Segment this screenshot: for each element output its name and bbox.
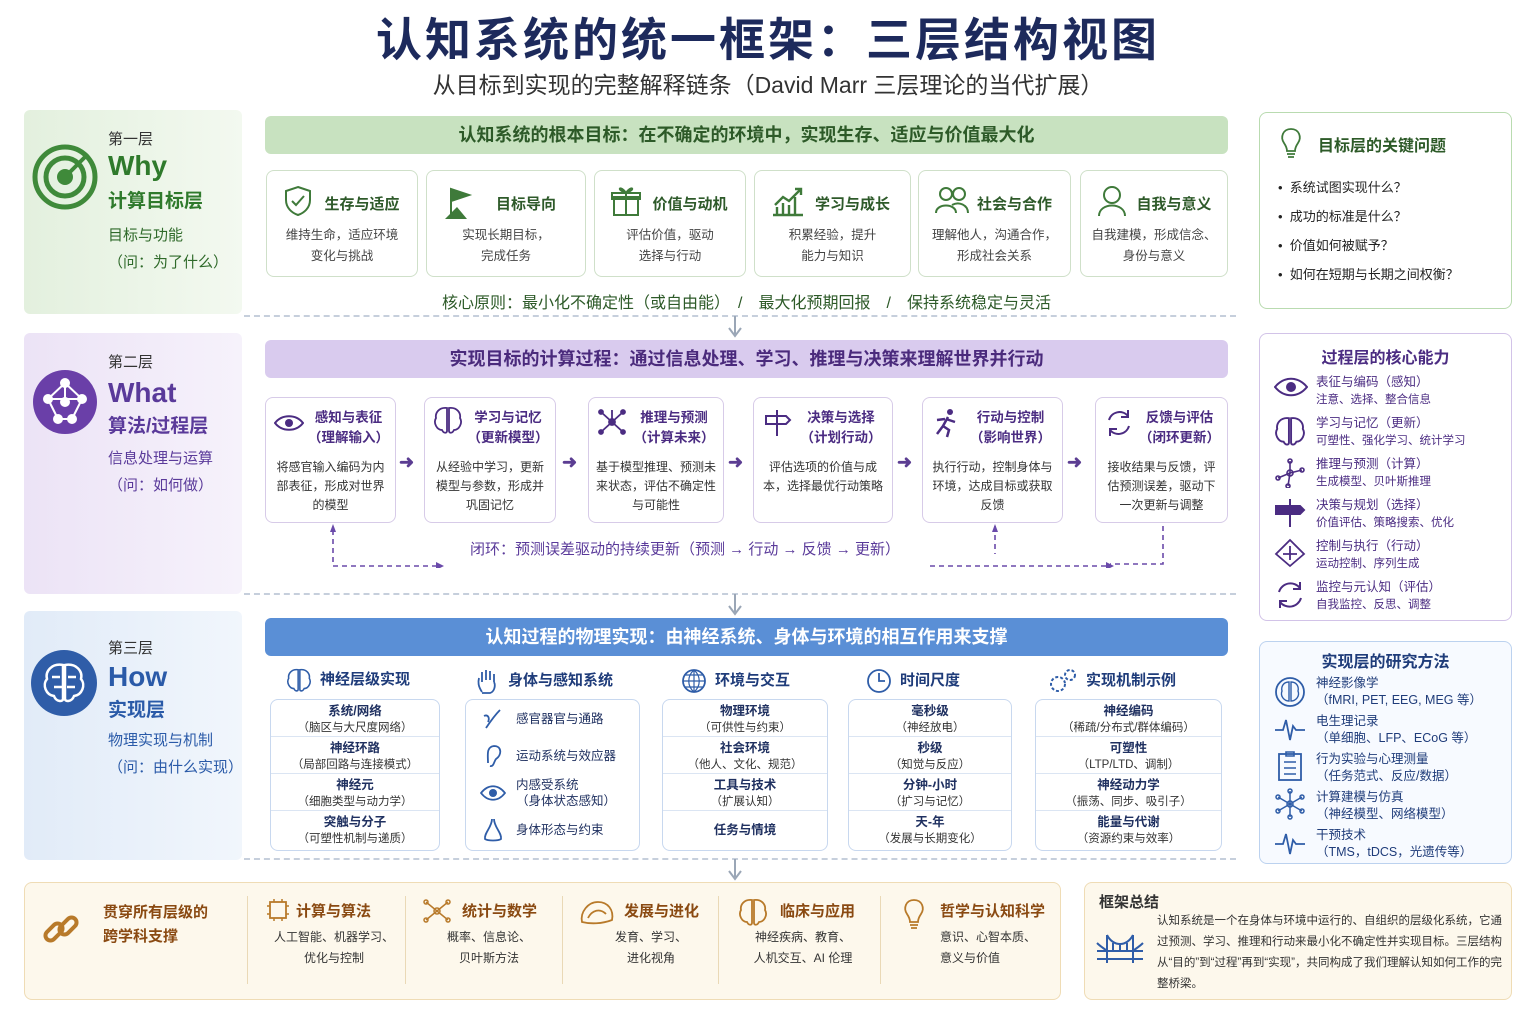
icon: bridge [1096, 934, 1144, 963]
tier 1: Why [24, 110, 242, 314]
icon: network [33, 370, 97, 434]
text: 身份与意义 [1123, 249, 1185, 263]
right panel: process capabilities [1259, 333, 1512, 621]
text: 天-年 [915, 815, 945, 829]
right panel: research methods: 神经影像学 [1316, 676, 1379, 690]
column: neural levels [287, 668, 410, 692]
text: 感官器官与通路 [516, 712, 604, 726]
band 3 header: 认知过程的物理实现：由神经系统、身体与环境的相互作用来支撑 [486, 627, 1008, 647]
text: （知觉与反应） [890, 759, 970, 771]
right panel: process capabilities: 表征与编码（感知） [1316, 375, 1429, 389]
right panel: process capabilities: 监控与元认知（评估） [1316, 580, 1441, 594]
band 2 header: 实现目标的计算过程：通过信息处理、学习、推理与决策来理解世界并行动 [450, 349, 1044, 369]
right panel: research methods: （TMS，tDCS，光遗传等） [1316, 845, 1472, 859]
text: 内感受系统 [516, 778, 579, 792]
arrow: tier2 to tier3 [728, 594, 742, 616]
right panel: process capabilities: 运动控制、序列生成 [1316, 558, 1420, 570]
tier 2: What: （问：如何做） [108, 477, 213, 494]
text: ➜ [399, 452, 414, 472]
process cards [265, 397, 396, 523]
text: （可塑性机制与递质） [298, 833, 412, 845]
text: 学习与成长 [815, 196, 890, 213]
text: 神经环路 [330, 741, 380, 755]
text: （影响世界） [970, 430, 1051, 445]
text: （发展与长期变化） [878, 833, 982, 845]
text: （更新模型） [468, 430, 548, 445]
discipline: clinical: 神经疾病、教育、 [755, 930, 851, 944]
text: （计划行动） [800, 430, 882, 445]
process cards: 感知与表征 [315, 410, 382, 425]
text: 目标导向 [496, 196, 556, 213]
text: （可供性与约束） [699, 722, 791, 734]
text: 能力与知识 [801, 249, 864, 263]
tier 2: What: 信息处理与运算 [108, 450, 213, 467]
column: environment [682, 669, 790, 693]
right panel: research methods: （单细胞、LFP、ECoG 等） [1316, 731, 1476, 745]
discipline: evolution: 发展与进化 [624, 903, 699, 920]
discipline: clinical [739, 899, 855, 965]
goal cards [266, 170, 418, 277]
band 1 header: 认知系统的根本目标：在不确定的环境中，实现生存、适应与价值最大化 [458, 125, 1034, 145]
text: ➜ [897, 452, 912, 472]
text: 身体形态与约束 [516, 822, 604, 836]
text: （细胞类型与动力学） [298, 796, 412, 808]
tier 2: What: What [108, 377, 176, 408]
right panel: process capabilities: 推理与预测（计算） [1316, 457, 1429, 471]
goal cards: 维持生命，适应环境 [286, 228, 398, 242]
text: 系统/网络 [328, 704, 382, 718]
band 3 header [265, 618, 1228, 656]
tier 3: How: 第三层 [108, 640, 153, 657]
tier 2: What: 算法/过程层 [108, 416, 208, 437]
text: 神经编码 [1103, 704, 1154, 718]
text: 从经验中学习，更新模型与参数，形成并巩固记忆 [436, 460, 544, 512]
discipline: statistics: 统计与数学 [462, 903, 537, 920]
discipline: philosophy: 哲学与认知科学 [940, 903, 1045, 920]
text: （神经放电） [896, 722, 964, 734]
right panel: process capabilities: 注意、选择、整合信息 [1316, 394, 1431, 406]
right panel: research methods: 行为实验与心理测量 [1316, 752, 1429, 766]
text: 推理与预测 [640, 410, 708, 425]
subtitle: 从目标到实现的完整解释链条（David Marr 三层理论的当代扩展） [433, 72, 1103, 98]
bottom panel: interdisciplinary support: 贯穿所有层级的 [103, 904, 208, 921]
column: mechanisms: 实现机制示例 [1086, 672, 1176, 689]
icon: bulb [1281, 128, 1301, 158]
bottom right: framework summary: 框架总结 [1099, 894, 1159, 911]
right panel: process capabilities: 过程层的核心能力 [1321, 350, 1450, 367]
goal cards: 变化与挑战 [311, 249, 373, 263]
text: 完成任务 [481, 249, 531, 263]
right panel: goal questions: • 如何在短期与长期之间权衡？ [1278, 267, 1459, 282]
text: （局部回路与连接模式） [292, 759, 418, 771]
right panel: research methods [1259, 641, 1512, 864]
discipline: statistics: 概率、信息论、 [447, 930, 531, 944]
arrow: tier1 to tier2 [728, 316, 742, 338]
text: 形成社会关系 [957, 249, 1032, 263]
loop: closed feedback [330, 524, 1164, 568]
text: 可塑性 [1110, 741, 1147, 755]
bottom right: framework summary [1084, 882, 1512, 1000]
text: （扩习与记忆） [890, 796, 970, 808]
column: neural levels: 神经层级实现 [320, 671, 410, 688]
right panel: research methods: 电生理记录 [1316, 714, 1379, 728]
text: 任务与情境 [714, 823, 776, 837]
right panel: goal questions: 目标层的关键问题 [1318, 138, 1446, 155]
text: 执行行动，控制身体与环境，达成目标或获取反馈 [932, 460, 1052, 512]
icon: target [32, 144, 98, 210]
right panel: goal questions: • 价值如何被赋予？ [1278, 238, 1394, 253]
arrow: tier3 to bottom [728, 859, 742, 880]
discipline: philosophy [904, 899, 1045, 965]
tier 2: What: 第二层 [108, 354, 153, 371]
discipline: evolution: 进化视角 [627, 951, 675, 965]
band 2 header [265, 340, 1228, 378]
right panel: process capabilities: 控制与执行（行动） [1316, 539, 1429, 553]
text: 物理环境 [720, 704, 770, 718]
text: 自我建模，形成信念、 [1091, 228, 1216, 242]
core principle: 核心原则：最小化不确定性（或自由能） / 最大化预期回报 / 保持系统稳定与灵活 [442, 295, 1051, 312]
text: 工具与技术 [714, 778, 776, 792]
text: （振荡、同步、吸引子） [1065, 796, 1192, 808]
tier 3: How: （问：由什么实现） [108, 759, 243, 776]
text: （LTP/LTD、调制） [1078, 759, 1179, 771]
text: 实现长期目标， [462, 228, 550, 242]
right panel: research methods: （fMRI, PET, EEG, MEG 等） [1316, 693, 1482, 707]
right panel: research methods: 实现层的研究方法 [1321, 654, 1450, 671]
bottom right: framework summary: 认知系统是一个在身体与环境中运行的、自组织的层级化系统，它通过预测、学习、推理和行动来最小化不确定性并实现目标。三层结构从“目的”到“过程”再到“实现”，共同构成了我们理解认知如何工作的完整桥梁。 [1157, 915, 1502, 990]
text: （闭环更新） [1139, 430, 1220, 445]
goal cards: 生存与适应 [324, 196, 400, 213]
column: environment: 环境与交互 [715, 672, 790, 689]
right panel: goal questions: • 成功的标准是什么？ [1278, 209, 1407, 224]
text: 理解他人，沟通合作， [932, 228, 1057, 242]
right panel: process capabilities: 自我监控、反思、调整 [1316, 599, 1431, 611]
text: 积累经验，提升 [789, 228, 876, 242]
text: 秒级 [917, 741, 942, 755]
discipline: philosophy: 意义与价值 [940, 951, 1000, 965]
discipline: computing [267, 899, 394, 965]
text: 社会环境 [720, 741, 770, 755]
discipline: evolution: 发育、学习、 [615, 930, 687, 944]
text: 能量与代谢 [1097, 815, 1160, 829]
text: 接收结果与反馈，评估预测误差，驱动下一次更新与调整 [1107, 460, 1216, 512]
tier 3: How: How [108, 661, 167, 692]
bottom panel: interdisciplinary support: 跨学科支撑 [103, 928, 178, 945]
right panel: process capabilities: 生成模型、贝叶斯推理 [1316, 476, 1431, 488]
discipline: clinical: 临床与应用 [780, 903, 855, 920]
right panel: process capabilities: 价值评估、策略搜索、优化 [1316, 517, 1454, 529]
tier 3: How [24, 611, 242, 860]
text: 神经元 [336, 778, 374, 792]
right panel: research methods: （任务范式、反应/数据） [1316, 769, 1457, 783]
text: 反馈与评估 [1146, 410, 1213, 425]
text: 基于模型推理、预测未来状态，评估不确定性与可能性 [596, 460, 716, 512]
tier 3: How: 实现层 [108, 700, 165, 721]
right panel: process capabilities: 可塑性、强化学习、统计学习 [1316, 435, 1466, 447]
discipline: clinical: 人机交互、AI 伦理 [754, 951, 852, 965]
band 1 header [265, 116, 1228, 154]
tier 1: Why: 目标与功能 [108, 227, 183, 244]
right panel: research methods: 计算建模与仿真 [1316, 790, 1404, 804]
bottom panel: interdisciplinary support [24, 882, 1061, 1000]
column: time scale [867, 669, 960, 693]
text: （稀疏/分布式/群体编码） [1062, 722, 1195, 734]
discipline: philosophy: 意识、心智本质、 [940, 930, 1036, 944]
text: （脑区与大尺度网络） [298, 722, 412, 734]
icon: brain [31, 650, 97, 716]
right panel: goal questions [1259, 112, 1512, 309]
right panel: goal questions: • 系统试图实现什么？ [1278, 180, 1407, 195]
text: 运动系统与效应器 [516, 748, 616, 762]
discipline: statistics [423, 899, 537, 965]
process cards: （理解输入） [308, 430, 389, 445]
column: body: 身体与感知系统 [508, 672, 613, 689]
text: 评估选项的价值与成本，选择最优行动策略 [763, 460, 883, 493]
text: 毫秒级 [911, 704, 949, 718]
right panel: process capabilities: 决策与规划（选择） [1316, 498, 1429, 512]
discipline: computing: 计算与算法 [296, 903, 371, 920]
text: 学习与记忆 [474, 410, 542, 425]
discipline: computing: 人工智能、机器学习、 [274, 930, 394, 944]
text: （他人、文化、规范） [688, 759, 802, 771]
text: 行动与控制 [977, 410, 1044, 425]
tier 1: Why: 计算目标层 [108, 191, 203, 212]
tier 3: How: 物理实现与机制 [108, 732, 213, 749]
loop: closed feedback: 闭环：预测误差驱动的持续更新（预测 → 行动 → 反馈 → 更新） [470, 541, 900, 558]
text: 选择与行动 [639, 249, 701, 263]
text: 价值与动机 [652, 196, 728, 213]
tier 2: What [24, 333, 242, 594]
text: （身体状态感知） [516, 794, 616, 808]
right panel: research methods: （神经模型、网络模型） [1316, 807, 1454, 821]
text: （计算未来） [634, 430, 714, 445]
text: ➜ [728, 452, 743, 472]
tier 1: Why: Why [108, 150, 167, 181]
text: 神经动力学 [1097, 778, 1160, 792]
icon: chain link [44, 916, 78, 942]
tier 1: Why: （问：为了什么） [108, 254, 228, 271]
title: 认知系统的统一框架：三层结构视图 [376, 14, 1160, 66]
discipline: statistics: 贝叶斯方法 [459, 951, 519, 965]
text: 决策与选择 [807, 410, 875, 425]
process cards: 将感官输入编码为内部表征，形成对世界的模型 [276, 460, 384, 512]
column: time scale: 时间尺度 [900, 672, 960, 689]
discipline: evolution [580, 901, 699, 965]
right panel: process capabilities: 学习与记忆（更新） [1316, 416, 1429, 430]
tier 1: Why: 第一层 [108, 131, 153, 148]
column: body [478, 670, 613, 694]
text: ➜ [562, 452, 577, 472]
column: mechanisms [1050, 669, 1176, 692]
text: （资源约束与效率） [1077, 833, 1180, 845]
text: 社会与合作 [977, 196, 1052, 213]
right panel: research methods: 干预技术 [1316, 828, 1366, 842]
text: 自我与意义 [1136, 196, 1212, 213]
text: 分钟-小时 [903, 778, 957, 792]
discipline: computing: 优化与控制 [304, 951, 364, 965]
text: ➜ [1067, 452, 1082, 472]
text: 突触与分子 [324, 815, 386, 829]
text: 评估价值，驱动 [626, 228, 714, 242]
text: （扩展认知） [710, 796, 780, 808]
